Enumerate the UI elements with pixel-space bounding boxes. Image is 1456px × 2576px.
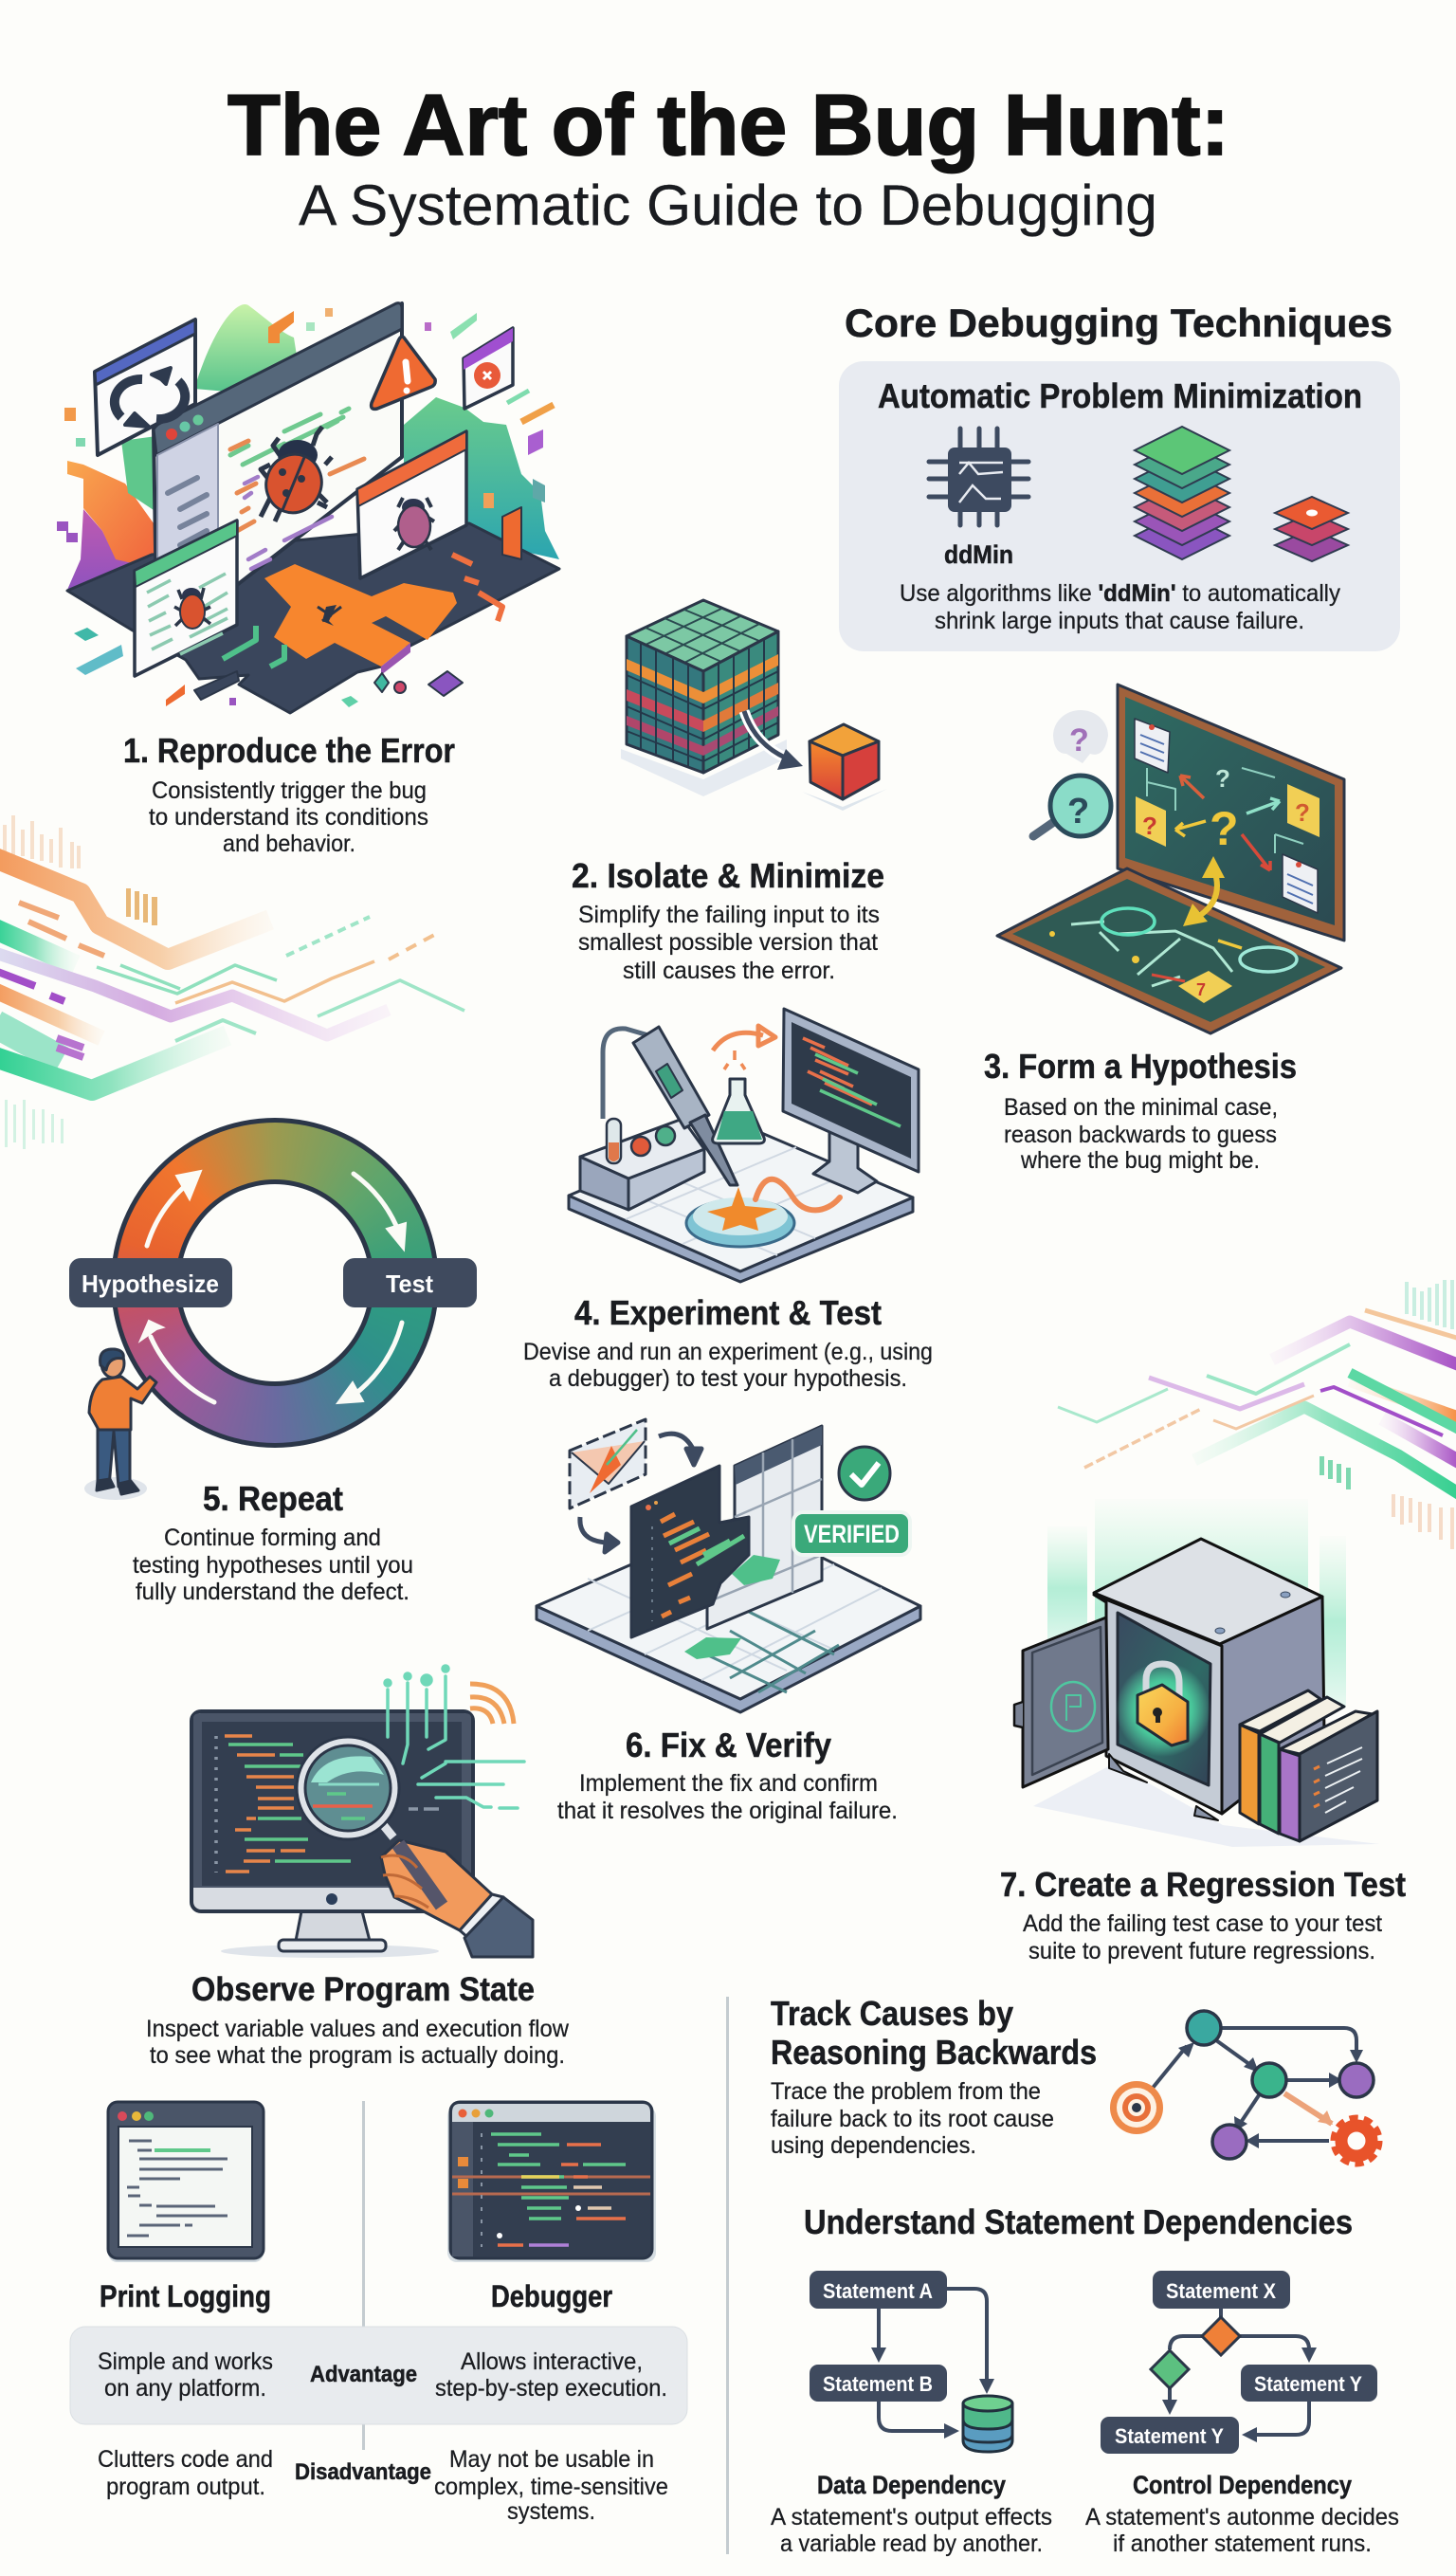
orange arrow [713,1026,775,1050]
illustration: observe program state [191,1666,533,1958]
chart: hypothesize-test cycle ring [69,1118,477,1500]
node: statement Y right [1241,2365,1377,2402]
body: where the bug might be. [1020,1147,1260,1174]
body: using dependencies. [771,2132,976,2159]
body [557,1770,898,1824]
body: reason backwards to guess [1004,1122,1277,1148]
icon: warning [372,337,435,409]
print logging advantage: on any platform. [104,2375,266,2402]
window: sync [95,320,195,455]
code panel [631,1466,749,1637]
node: statement B [810,2365,947,2402]
step 6 text [557,1726,898,1824]
panel heading: Automatic Problem Minimization [878,376,1362,415]
step 7 text [1000,1865,1406,1964]
decision: green [1151,2350,1189,2388]
icon: minimized stack [1275,497,1348,561]
bench [580,1119,704,1210]
icon: question bubble: ? [1069,722,1089,758]
label: ddMin: ddMin [944,540,1013,569]
vertical comparison divider [362,2101,365,2450]
signal arcs [470,1684,514,1724]
body: Continue forming and [164,1525,381,1551]
grid panel [707,1426,822,1629]
body: Consistently trigger the bug [152,777,427,804]
illustration: fix and verify [537,1419,920,1712]
heading: 4. Experiment & Test [574,1293,882,1332]
back board: ? [1142,812,1157,840]
large cube [627,600,778,773]
cycle arrows [140,1171,406,1403]
icon: check badge [839,1447,890,1500]
body: Implement the fix and confirm [579,1770,878,1797]
floating debris [57,308,554,707]
body [523,1339,933,1392]
decorative circuit traces: right [1058,1280,1456,1549]
heading: 3. Form a Hypothesis [984,1047,1297,1086]
icon: padlock [1116,1662,1210,1757]
title: The Art of the Bug Hunt: [228,78,1229,174]
step 1 text [123,731,455,857]
heading: Observe Program State [191,1971,535,2008]
label: disadvantage: Disadvantage [295,2459,431,2485]
debugger disadvantage: May not be usable in [449,2446,654,2473]
window: purple [464,328,513,409]
label: debugger: Debugger [491,2279,612,2313]
illustration: lab experiment [569,1009,919,1282]
body: testing hypotheses until you [133,1552,413,1579]
books [1240,1690,1377,1841]
body [771,2504,1052,2557]
body [578,902,880,984]
pipette [633,1027,737,1185]
step 3 text [984,1047,1297,1174]
body: A statement's output effects [771,2504,1052,2530]
platform [569,1124,913,1282]
body: Simplify the failing input to its [578,902,880,928]
data dependency text [771,2471,1052,2557]
step 5 text [133,1479,413,1605]
back board [1118,685,1344,941]
debugger disadvantage [434,2446,668,2525]
body [133,1525,413,1605]
pill: test: Test [386,1270,433,1298]
print logging disadvantage [98,2446,273,2500]
safe body [1094,1539,1324,1820]
heading: Track Causes by [771,1994,1013,2033]
orange floor path [264,564,457,667]
arrows [580,1434,701,1552]
control dependency text [1085,2471,1399,2557]
flat board: 7 [1196,980,1206,999]
node: statement Y lower: Statement Y [1115,2424,1224,2448]
comparison table [70,2327,687,2525]
print logging advantage: Simple and works [98,2348,273,2375]
main window [154,303,402,607]
heading: 2. Isolate & Minimize [572,856,884,895]
icon: ddMin chip [929,429,1028,525]
description: shrink large inputs that cause failure. [935,608,1304,634]
diagram: backward trace graph [1110,2011,1379,2164]
body: Trace the problem from the [771,2078,1041,2105]
title [228,78,1229,237]
body [1085,2504,1399,2557]
node: statement Y lower [1101,2417,1239,2454]
stand cable [603,1029,648,1119]
icon: magnifier [1033,776,1111,836]
node: target [1110,2081,1163,2134]
decision: orange [1202,2317,1240,2355]
safe door [1014,1617,1108,1787]
pill: hypothesize [69,1258,232,1307]
body: suite to prevent future regressions. [1028,1938,1375,1964]
graph nodes [1187,2011,1374,2159]
debugger disadvantage: systems. [507,2498,595,2525]
debugger advantage [435,2348,667,2402]
heading: Reasoning Backwards [771,2033,1097,2072]
diagram: data dependency [810,2271,1012,2452]
body: smallest possible version that [578,929,878,956]
diagram: control dependency [1101,2271,1377,2454]
body [1004,1094,1278,1174]
label: advantage: Advantage [310,2362,417,2387]
body: to understand its conditions [149,804,428,831]
panel: automatic problem minimization [839,361,1400,651]
platform [537,1517,920,1712]
debugger disadvantage: complex, time-sensitive [434,2474,668,2500]
subtitle: A Systematic Guide to Debugging [299,174,1157,237]
body: a variable read by another. [780,2530,1043,2557]
icon: ladybug [258,427,332,521]
print logging disadvantage: Clutters code and [98,2446,273,2473]
body: fully understand the defect. [136,1579,410,1605]
print logging disadvantage: program output. [106,2474,265,2500]
window: green bug [135,521,237,676]
node: statement B: Statement B [823,2372,933,2396]
step 4 text [523,1293,933,1392]
body: and behavior. [223,831,355,857]
heading [771,1994,1097,2072]
heading: 6. Fix & Verify [626,1726,831,1764]
icon: magnifier: ? [1067,792,1089,831]
double arrow [1183,856,1225,926]
label: print logging: Print Logging [100,2279,271,2313]
track causes text [771,1994,1097,2159]
node: statement X: Statement X [1166,2279,1276,2303]
body: Devise and run an experiment (e.g., using [523,1339,933,1365]
body: Add the failing test case to your test [1023,1910,1382,1937]
green glow [1047,1499,1346,1717]
icon: print logging window [108,2102,264,2262]
body: failure back to its root cause [771,2106,1054,2132]
body [149,777,428,857]
heading: Data Dependency [817,2471,1006,2499]
illustration: isolate cube [621,600,887,811]
body: Based on the minimal case, [1004,1094,1278,1121]
back board: ? [1210,802,1239,855]
dish with reaction [686,1179,840,1247]
icon: debugger window [447,2102,656,2262]
illustration: hypothesis boards [997,685,1344,1033]
observe program state text [146,1971,570,2069]
body [771,2078,1054,2159]
flask [713,1079,764,1143]
heading: core debugging techniques: Core Debugging Techniques [845,301,1392,345]
heading: statement dependencies: Understand Statement Dependencies [804,2202,1353,2241]
flat board [997,868,1341,1033]
pill: hypothesize: Hypothesize [82,1270,219,1298]
print logging advantage [98,2348,273,2402]
body [1023,1910,1382,1964]
badge: verified: VERIFIED [804,1520,900,1548]
debugger advantage: Allows interactive, [461,2348,643,2375]
node: statement Y right: Statement Y [1254,2372,1362,2396]
decorative circuit traces: left [0,815,464,1149]
ring [111,1118,439,1448]
body: that it resolves the original failure. [557,1798,898,1824]
body: A statement's autonme decides [1085,2504,1399,2530]
node: statement X [1153,2271,1290,2309]
debugger advantage: step-by-step execution. [435,2375,667,2402]
monitor [783,1009,919,1193]
icon: question bubble [1053,710,1108,763]
heading: Control Dependency [1133,2471,1352,2499]
window: red bug [357,431,466,578]
step 2 text [572,856,884,984]
monitor [191,1711,473,1951]
advantage band [70,2327,687,2424]
badge: verified [793,1512,910,1555]
body: Inspect variable values and execution flow [146,2016,570,2042]
node: statement A: Statement A [823,2279,933,2303]
illustration: reproduce the error [57,303,559,713]
code lines [216,1736,439,1873]
back board: ? [1215,764,1230,793]
person pushing ring [84,1349,156,1500]
arrow [744,711,803,770]
small red cube [802,724,887,811]
description: Use algorithms like 'ddMin' to automatically [900,580,1340,607]
body: to see what the program is actually doing. [150,2042,565,2069]
body: still causes the error. [623,958,835,984]
illustration: regression safe and books [1014,1499,1379,1847]
description [900,580,1340,634]
heading: 5. Repeat [203,1479,343,1518]
floor [67,523,559,713]
code lines [230,409,349,465]
signal lines [385,1666,524,1808]
icon: database [963,2396,1012,2452]
icon: gear [1334,2118,1379,2164]
body: a debugger) to test your hypothesis. [549,1365,907,1392]
icon: broken envelope [570,1419,646,1508]
body: if another statement runs. [1113,2530,1372,2557]
body [146,2016,570,2069]
icon: large input stack [1135,427,1229,559]
background blobs [67,304,559,597]
magnifier and hand [297,1737,533,1957]
node: statement A [810,2271,947,2309]
section divider [726,1997,729,2554]
pill: test [343,1258,477,1307]
back board: ? [1295,798,1310,827]
heading: 7. Create a Regression Test [1000,1865,1406,1904]
heading: 1. Reproduce the Error [123,731,455,770]
